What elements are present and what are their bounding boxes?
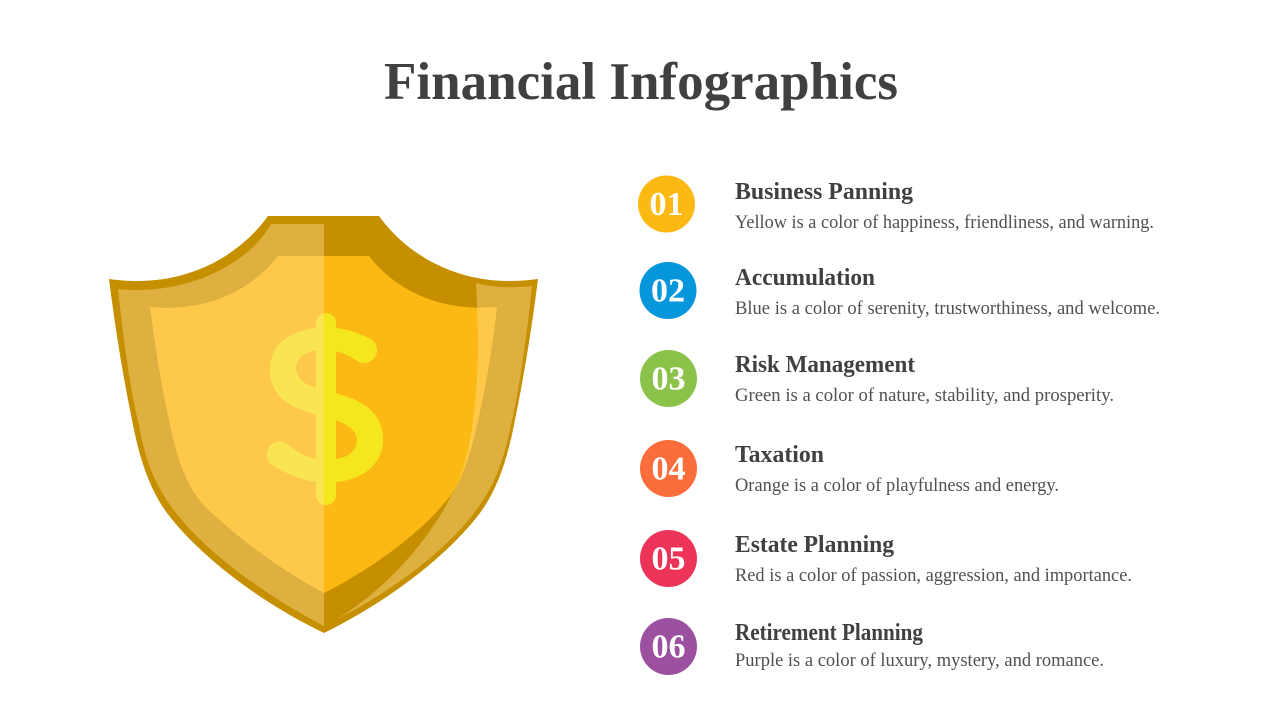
number 04: 04 xyxy=(652,450,686,488)
description 01: Yellow is a color of happiness, friendliness, and warning. xyxy=(735,213,1154,233)
list item 02 xyxy=(640,262,1160,319)
title: Financial Infographics xyxy=(384,53,898,111)
heading 06: Retirement Planning xyxy=(735,620,923,646)
icon: shield with dollar sign xyxy=(109,216,538,633)
dollar sign right half xyxy=(324,313,383,505)
dollar sign xyxy=(267,313,383,505)
list item 03 xyxy=(640,350,1114,407)
heading 01: Business Panning xyxy=(735,179,913,205)
list item 04 xyxy=(640,440,1059,497)
list item 01 xyxy=(638,176,1154,233)
list item 05 xyxy=(640,530,1132,587)
heading 02: Accumulation xyxy=(735,265,875,291)
badge 02 xyxy=(640,262,696,319)
description 04: Orange is a color of playfulness and energy. xyxy=(735,476,1059,496)
shield inner right face xyxy=(324,256,497,593)
number 02: 02 xyxy=(651,272,685,310)
description 06: Purple is a color of luxury, mystery, and romance. xyxy=(735,651,1104,671)
heading 04: Taxation xyxy=(735,442,824,468)
description 03: Green is a color of nature, stability, and prosperity. xyxy=(735,386,1114,406)
number 06: 06 xyxy=(652,628,686,666)
heading 05: Estate Planning xyxy=(735,532,894,558)
shield right band xyxy=(337,283,532,619)
badge 06 xyxy=(640,618,697,675)
shield outer rim xyxy=(109,216,538,633)
badge 01 xyxy=(638,176,695,232)
description 02: Blue is a color of serenity, trustworthiness, and welcome. xyxy=(735,299,1160,319)
badge 04 xyxy=(640,440,697,497)
heading 03: Risk Management xyxy=(735,352,915,378)
shield inner left face xyxy=(150,256,324,593)
badge 05 xyxy=(640,530,697,587)
dollar sign left half xyxy=(266,313,324,505)
description 05: Red is a color of passion, aggression, and importance. xyxy=(735,566,1132,586)
list item 06 xyxy=(640,618,1104,675)
number 01: 01 xyxy=(650,186,684,223)
number 05: 05 xyxy=(652,540,686,578)
badge 03 xyxy=(640,350,697,407)
number 03: 03 xyxy=(652,360,686,398)
shield right highlight xyxy=(457,307,497,485)
shield left band xyxy=(118,224,324,626)
